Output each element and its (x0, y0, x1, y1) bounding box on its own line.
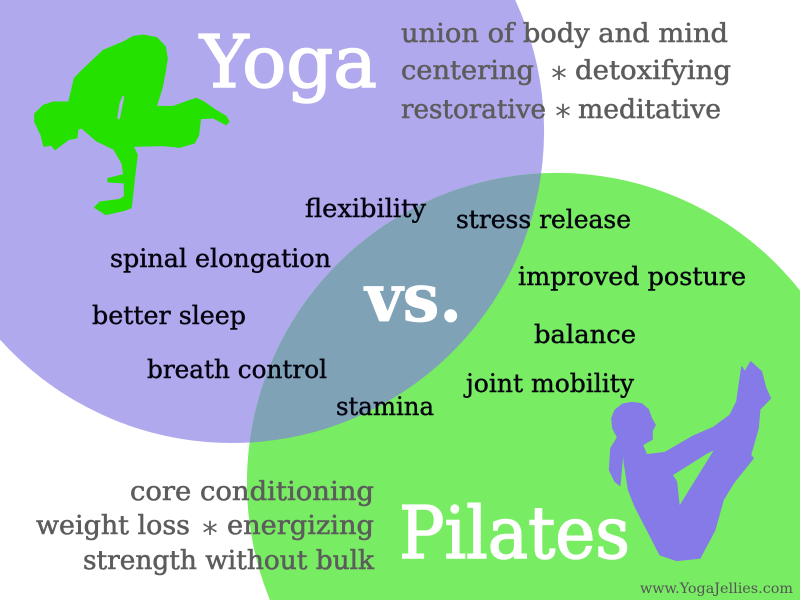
text block: shared benefits (92, 194, 746, 421)
text block: shared benefits: joint mobility (463, 369, 635, 398)
title: Yoga: Yoga (199, 20, 377, 104)
icon: pilates teaser pose silhouette (609, 362, 771, 561)
icon: yoga crow pose silhouette (35, 35, 229, 214)
text block: yoga qualities: detoxifying (575, 55, 731, 86)
text block: shared benefits: spinal elongation (110, 244, 331, 273)
text block: yoga qualities: * (551, 61, 567, 97)
text block: yoga qualities: * (555, 99, 571, 135)
text block: pilates qualities: energizing (227, 510, 374, 541)
website credit: www.YogaJellies.com (640, 581, 793, 597)
text block: shared benefits: flexibility (305, 194, 427, 223)
text block: yoga qualities: union of body and mind (401, 18, 728, 49)
text block: shared benefits: breath control (147, 355, 327, 384)
text block: shared benefits: improved posture (518, 262, 746, 291)
title: vs.: vs. (363, 259, 462, 337)
text block: pilates qualities: weight loss (36, 510, 190, 541)
overlap (250, 173, 542, 442)
text block: yoga qualities: restorative (401, 94, 546, 125)
text block: shared benefits: better sleep (92, 301, 246, 330)
text block: yoga qualities (401, 18, 731, 135)
text block: shared benefits: stamina (336, 392, 434, 421)
text block: pilates qualities: * (202, 516, 218, 552)
text block: yoga qualities: meditative (578, 94, 721, 125)
yoga circle (0, 0, 544, 443)
title: Pilates: Pilates (399, 491, 630, 575)
text block: shared benefits: stress release (456, 205, 631, 234)
text block: pilates qualities (36, 476, 375, 576)
text block: shared benefits: balance (534, 320, 636, 349)
text block: yoga qualities: centering (401, 55, 534, 86)
pilates circle (247, 173, 800, 600)
text block: pilates qualities: core conditioning (130, 476, 374, 507)
text block: pilates qualities: strength without bulk (83, 545, 375, 576)
